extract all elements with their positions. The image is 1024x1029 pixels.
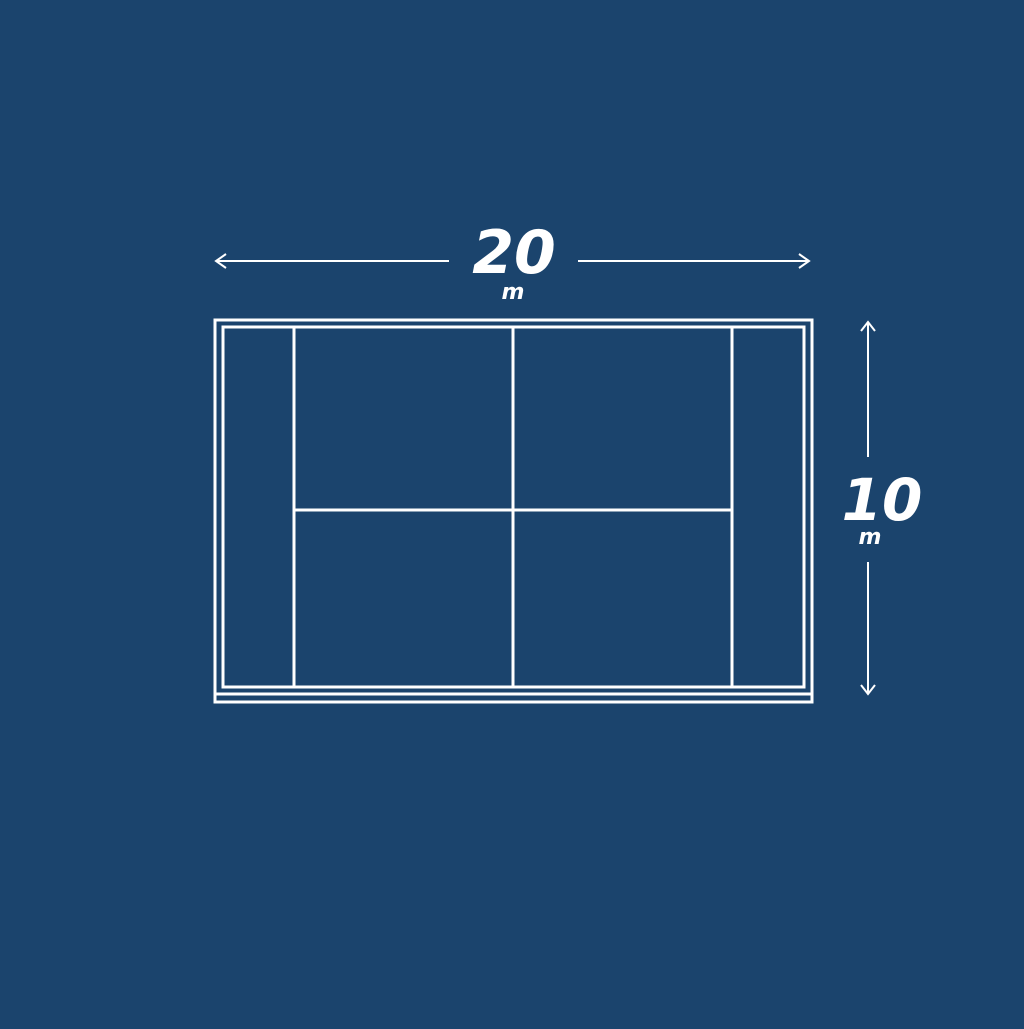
label: 10 m: 10 bbox=[842, 466, 922, 534]
label: 20 m: m bbox=[502, 280, 524, 305]
label: 20 m: 20 bbox=[472, 218, 556, 288]
arrow: height dimension bbox=[861, 322, 875, 694]
court outline bbox=[215, 320, 812, 702]
label: 10 m: m bbox=[859, 525, 881, 550]
arrow: width dimension bbox=[216, 254, 809, 268]
